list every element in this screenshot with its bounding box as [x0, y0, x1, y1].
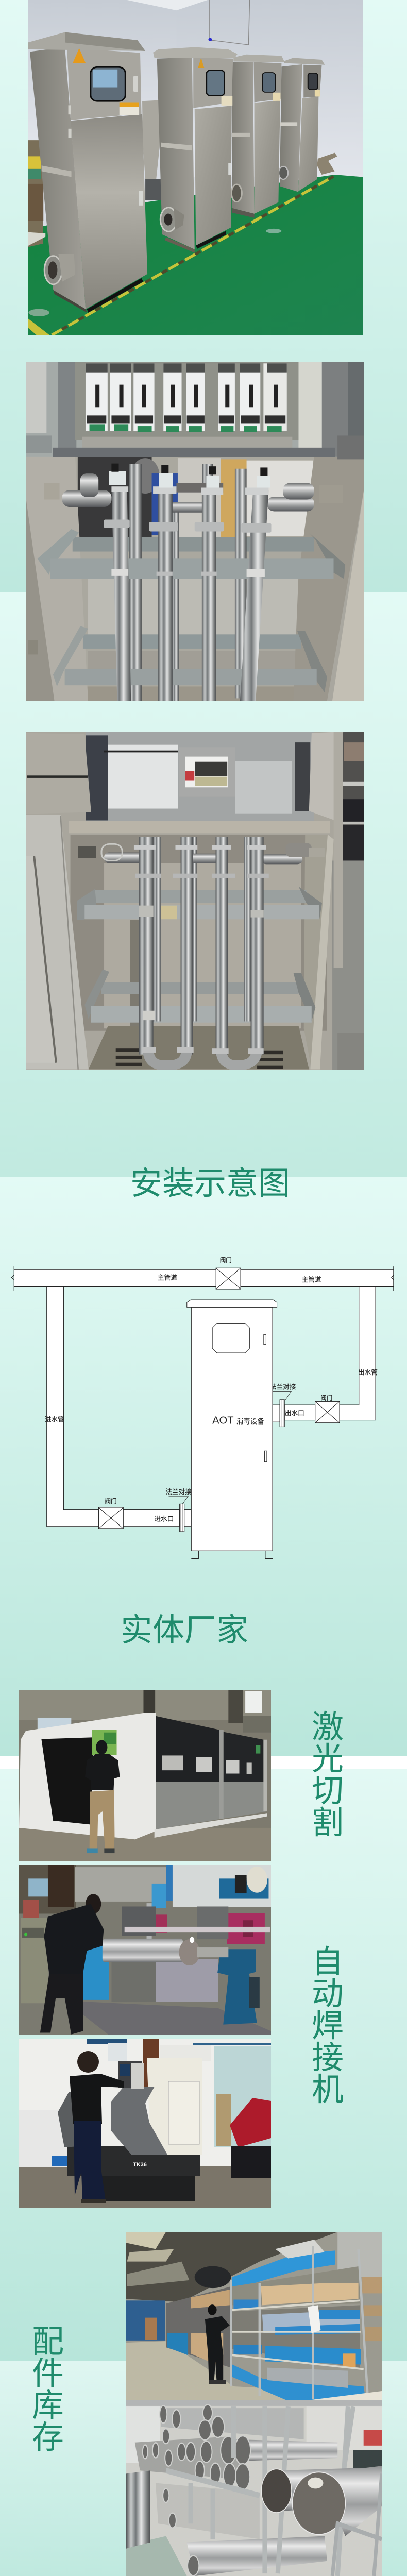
main pipe labels: 阀门 [220, 1256, 232, 1264]
vertical label: automatic welding machine: 接 [312, 2040, 344, 2076]
vertical label: parts inventory [32, 2324, 64, 2455]
welding worker [40, 1894, 104, 2035]
lathe operator [70, 2051, 124, 2203]
cabinet 4 [279, 58, 325, 192]
main pipe labels: 主管道 [302, 1276, 321, 1283]
photo: CNC lathe TK36 with operator [19, 2039, 271, 2208]
background band 2 [0, 592, 407, 1177]
title: physical factory: 实体厂家 [121, 1613, 248, 1648]
background band 5 [0, 2361, 407, 2576]
vertical label: laser cutting [312, 1709, 344, 1841]
outlet labels [270, 1369, 378, 1417]
vertical label: automatic welding machine [312, 1944, 344, 2108]
lathe model label: TK36 [133, 2162, 147, 2168]
cabinet 1 [28, 32, 147, 313]
tube ends [143, 2404, 250, 2575]
machine right and cartons [216, 2094, 271, 2178]
vertical label: automatic welding machine: 动 [312, 1976, 344, 2012]
cabinet interior [71, 835, 334, 1070]
inlet pipe run [47, 1287, 191, 1532]
inlet labels: 进水管 [45, 1416, 64, 1423]
AOT cabinet drawing [187, 1300, 277, 1559]
vertical label: laser cutting: 光 [312, 1741, 344, 1777]
photo: laser cutting machine with operator [19, 1690, 271, 1861]
installation schematic diagram [11, 1256, 394, 1559]
vertical label: parts inventory: 配 [32, 2324, 64, 2360]
title: installation diagram: 安装示意图 [130, 1166, 290, 1201]
upper cable tray [38, 529, 345, 579]
front UV pipes [104, 464, 271, 701]
outlet labels: 出水管 [358, 1369, 378, 1376]
machine frames and pink panels [122, 1867, 270, 1956]
inlet labels: 阀门 [105, 1498, 117, 1505]
vertical label: laser cutting: 割 [312, 1805, 344, 1841]
main shelving [231, 2240, 382, 2400]
machine housing [19, 1713, 267, 1839]
background band 1 [0, 0, 407, 592]
vertical label: parts inventory: 件 [32, 2356, 64, 2392]
blue positioner [83, 1942, 260, 2025]
top pipe elbows [78, 843, 325, 864]
inlet labels: 法兰对接 [165, 1488, 192, 1496]
galvanised upper panel with relay box [86, 732, 314, 821]
photo: stainless steel tube stock racks [126, 2400, 382, 2576]
rear pipes [154, 837, 251, 1021]
outlet pipe run [273, 1287, 376, 1427]
outlet labels: 出水口 [285, 1410, 304, 1417]
cabinet label: AOT 消毒设备 [212, 1415, 264, 1426]
base rail [83, 2002, 271, 2035]
eight ballast modules [86, 363, 287, 432]
four U-bent front pipes [134, 837, 269, 1065]
lathe body [58, 2058, 202, 2201]
galvanised upper panel [26, 362, 364, 459]
warehouse worker [205, 2304, 230, 2384]
rack uprights [166, 2406, 353, 2576]
photo: four stainless steel cabinets in a green-floored room [28, 0, 363, 335]
photo: open cabinet with relay box, trays and U-bent pipes [26, 732, 364, 1070]
cable trays [77, 887, 322, 1023]
control cabinet [21, 1918, 48, 2003]
far shelves [166, 2266, 231, 2368]
vertical label: parts inventory: 库 [32, 2388, 64, 2424]
cabinet 3 [231, 55, 284, 218]
outlet labels: 法兰对接 [270, 1383, 296, 1391]
photo: warehouse parts shelving with worker [126, 2232, 382, 2400]
back tube rows [126, 2408, 337, 2576]
left lower door [26, 815, 89, 1070]
vertical label: automatic welding machine: 机 [312, 2072, 344, 2108]
main pipe labels [158, 1256, 321, 1283]
operator [85, 1740, 120, 1853]
background band 4 [0, 1769, 407, 2361]
main pipe labels: 主管道 [158, 1274, 177, 1281]
inlet labels [45, 1416, 192, 1523]
two large foreground tubes [261, 2466, 382, 2536]
horizontal elbows and manifold [44, 473, 343, 513]
rear pipes [129, 464, 247, 701]
vertical label: parts inventory: 存 [32, 2420, 64, 2455]
vertical label: automatic welding machine: 焊 [312, 2008, 344, 2044]
main pipe with valve [11, 1266, 394, 1291]
outlet labels: 阀门 [320, 1394, 332, 1401]
vertical label: laser cutting: 切 [312, 1773, 344, 1809]
stainless tube on welder [103, 1937, 228, 1965]
cabinet 2 [153, 47, 238, 253]
inlet labels: 进水口 [155, 1515, 174, 1523]
background band 3 [0, 1177, 407, 1756]
lower cable tray [53, 626, 327, 692]
vertical label: laser cutting: 激 [312, 1709, 344, 1745]
photo: automatic welding machine with worker [19, 1865, 271, 2035]
vertical label: automatic welding machine: 自 [312, 1944, 344, 1980]
photo: open cabinet with eight white ballasts and four UV pipes [26, 362, 364, 701]
white separator band [0, 1756, 407, 1769]
